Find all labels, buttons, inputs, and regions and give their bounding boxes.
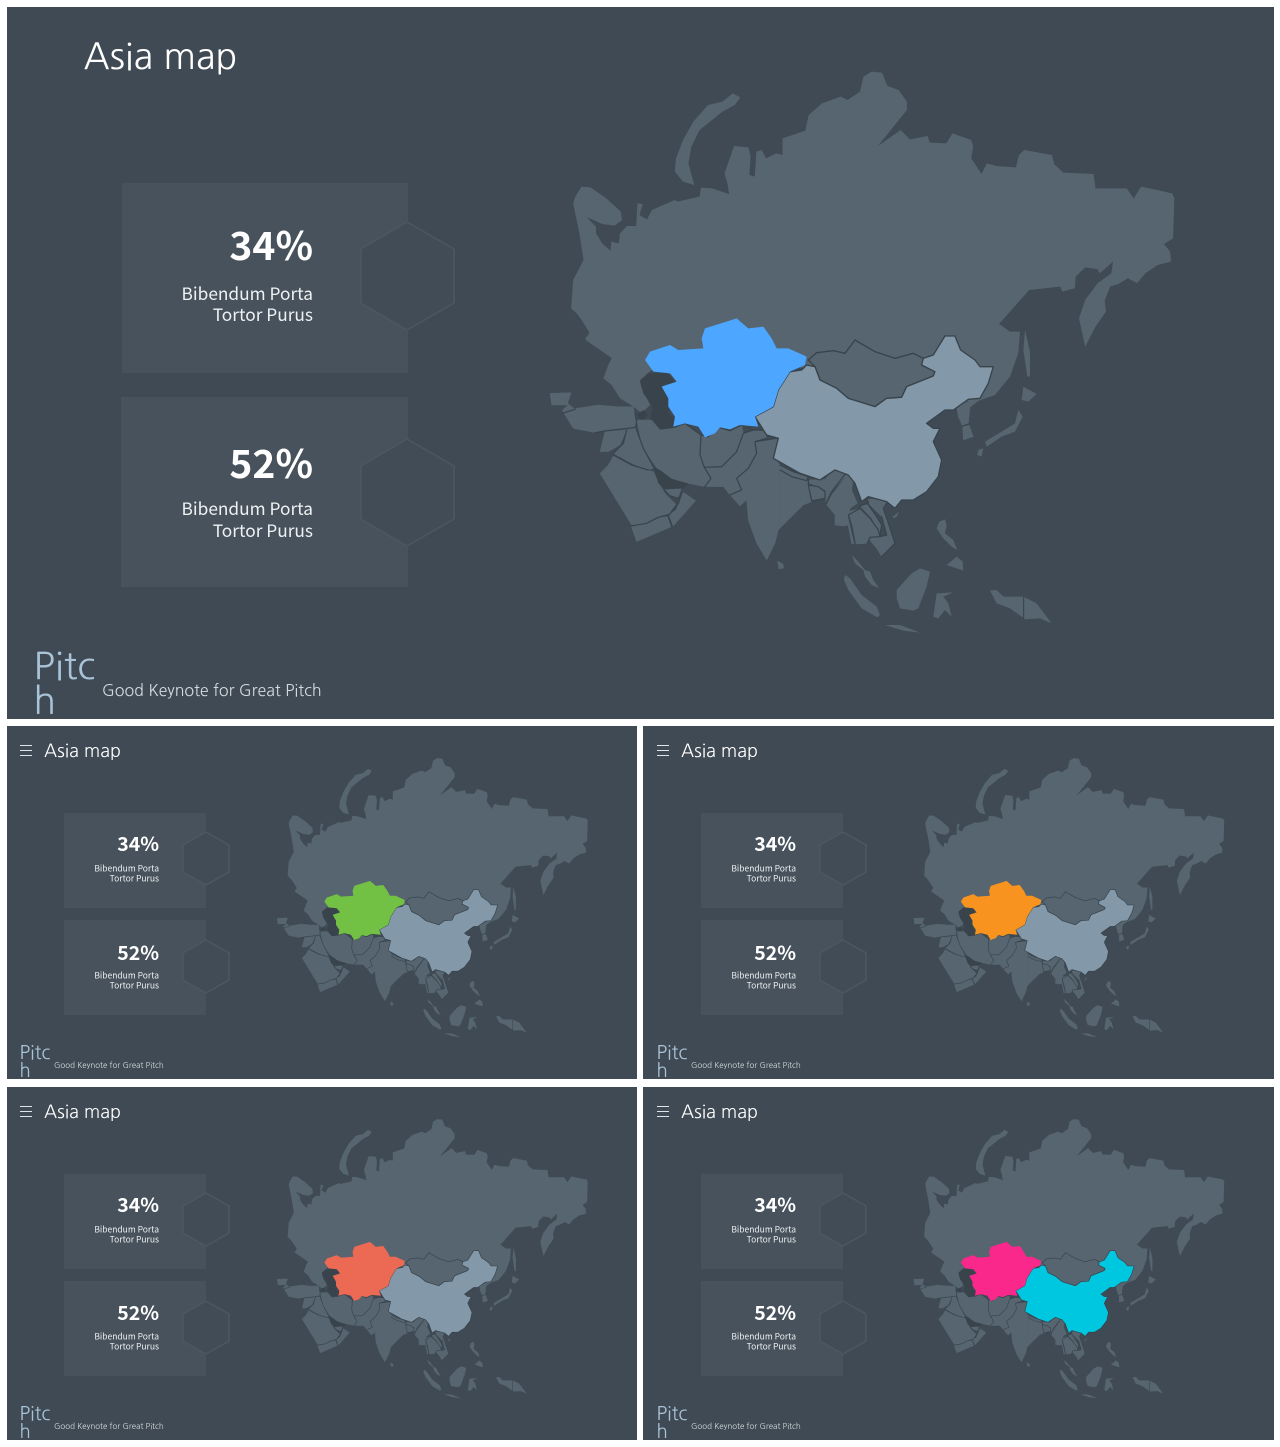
map: Asia with Central Asia in green <box>277 758 588 1037</box>
panel: coral variant <box>7 1087 637 1441</box>
tagline: Good Keynote for Great Pitch <box>691 1422 801 1431</box>
description: Tortor Purus <box>213 517 313 542</box>
description: Tortor Purus <box>747 1234 796 1246</box>
value: 52%: 52% <box>754 937 796 966</box>
description: Tortor Purus <box>747 980 796 992</box>
title: Asia map <box>84 39 237 75</box>
map: Asia with Central Asia in orange <box>914 758 1224 1037</box>
map: Asia with Central Asia in blue <box>550 72 1174 633</box>
title: Asia map <box>681 1103 758 1121</box>
panel: green variant <box>7 726 637 1080</box>
description: Bibendum Porta <box>182 495 313 520</box>
icon: hexagon <box>183 832 229 885</box>
map: Asia with Central Asia in coral <box>277 1119 588 1398</box>
value: 52%: 52% <box>117 1297 159 1326</box>
icon: menu <box>20 1106 32 1116</box>
logo: Pitch: h <box>656 1061 668 1080</box>
title: Asia map <box>44 742 121 760</box>
title: Asia map <box>44 1103 121 1121</box>
logo: Pitch: Pitc <box>656 1043 687 1062</box>
description: Tortor Purus <box>110 872 159 884</box>
stat card: 34% <box>64 1174 229 1269</box>
value: 34%: 34% <box>117 1189 159 1218</box>
icon: hexagon <box>361 439 454 546</box>
logo: Pitch: h <box>20 1422 31 1441</box>
description: Tortor Purus <box>110 980 159 992</box>
panel: pink and cyan variant <box>643 1087 1274 1441</box>
logo: Pitch: h <box>34 683 56 720</box>
stat card: 52% <box>701 920 866 1015</box>
stat card: 34% <box>701 1174 866 1269</box>
stat card: 52% <box>64 1281 229 1376</box>
stat card: 52% <box>701 1281 866 1376</box>
stat card: 34% <box>122 183 454 373</box>
icon: menu <box>20 746 32 756</box>
icon: hexagon <box>820 832 866 885</box>
description: Tortor Purus <box>747 1340 796 1352</box>
description: Bibendum Porta <box>731 1330 796 1342</box>
logo: Pitch: Pitc <box>656 1404 687 1423</box>
logo: Pitch: h <box>20 1061 31 1080</box>
logo: Pitch: Pitc <box>20 1043 50 1062</box>
description: Bibendum Porta <box>94 1330 159 1342</box>
description: Bibendum Porta <box>731 1224 796 1236</box>
panel: orange variant <box>643 726 1274 1080</box>
value: 34%: 34% <box>229 216 313 272</box>
icon: hexagon <box>183 940 229 993</box>
panel: main slide <box>7 7 1274 720</box>
stat card: 34% <box>701 813 866 908</box>
icon: hexagon <box>820 940 866 993</box>
icon: hexagon <box>820 1301 866 1354</box>
stat card: 52% <box>121 397 454 587</box>
description: Tortor Purus <box>213 301 313 326</box>
stat card: 52% <box>64 920 229 1015</box>
description: Bibendum Porta <box>94 862 159 874</box>
value: 52%: 52% <box>229 434 313 490</box>
tagline: Good Keynote for Great Pitch <box>691 1061 801 1070</box>
map: Asia with Central Asia in pink and China in cyan <box>914 1119 1224 1398</box>
value: 52%: 52% <box>117 937 159 966</box>
value: 34%: 34% <box>754 828 796 857</box>
tagline: Good Keynote for Great Pitch <box>102 683 322 699</box>
description: Bibendum Porta <box>731 970 796 982</box>
icon: menu <box>657 1106 669 1116</box>
tagline: Good Keynote for Great Pitch <box>54 1061 164 1070</box>
tagline: Good Keynote for Great Pitch <box>54 1422 164 1431</box>
description: Bibendum Porta <box>182 280 313 305</box>
icon: hexagon <box>361 222 454 330</box>
value: 34%: 34% <box>117 828 159 857</box>
description: Bibendum Porta <box>94 970 159 982</box>
description: Bibendum Porta <box>94 1224 159 1236</box>
value: 52%: 52% <box>754 1297 796 1326</box>
description: Tortor Purus <box>110 1340 159 1352</box>
icon: menu <box>657 746 669 756</box>
icon: hexagon <box>183 1301 229 1354</box>
logo: Pitch: Pitc <box>34 648 95 685</box>
logo: Pitch: h <box>656 1422 668 1441</box>
logo: Pitch: Pitc <box>20 1404 50 1423</box>
title: Asia map <box>681 742 758 760</box>
icon: hexagon <box>820 1193 866 1246</box>
description: Bibendum Porta <box>731 862 796 874</box>
value: 34%: 34% <box>754 1189 796 1218</box>
description: Tortor Purus <box>747 872 796 884</box>
icon: hexagon <box>183 1193 229 1246</box>
stat card: 34% <box>64 813 229 908</box>
description: Tortor Purus <box>110 1234 159 1246</box>
